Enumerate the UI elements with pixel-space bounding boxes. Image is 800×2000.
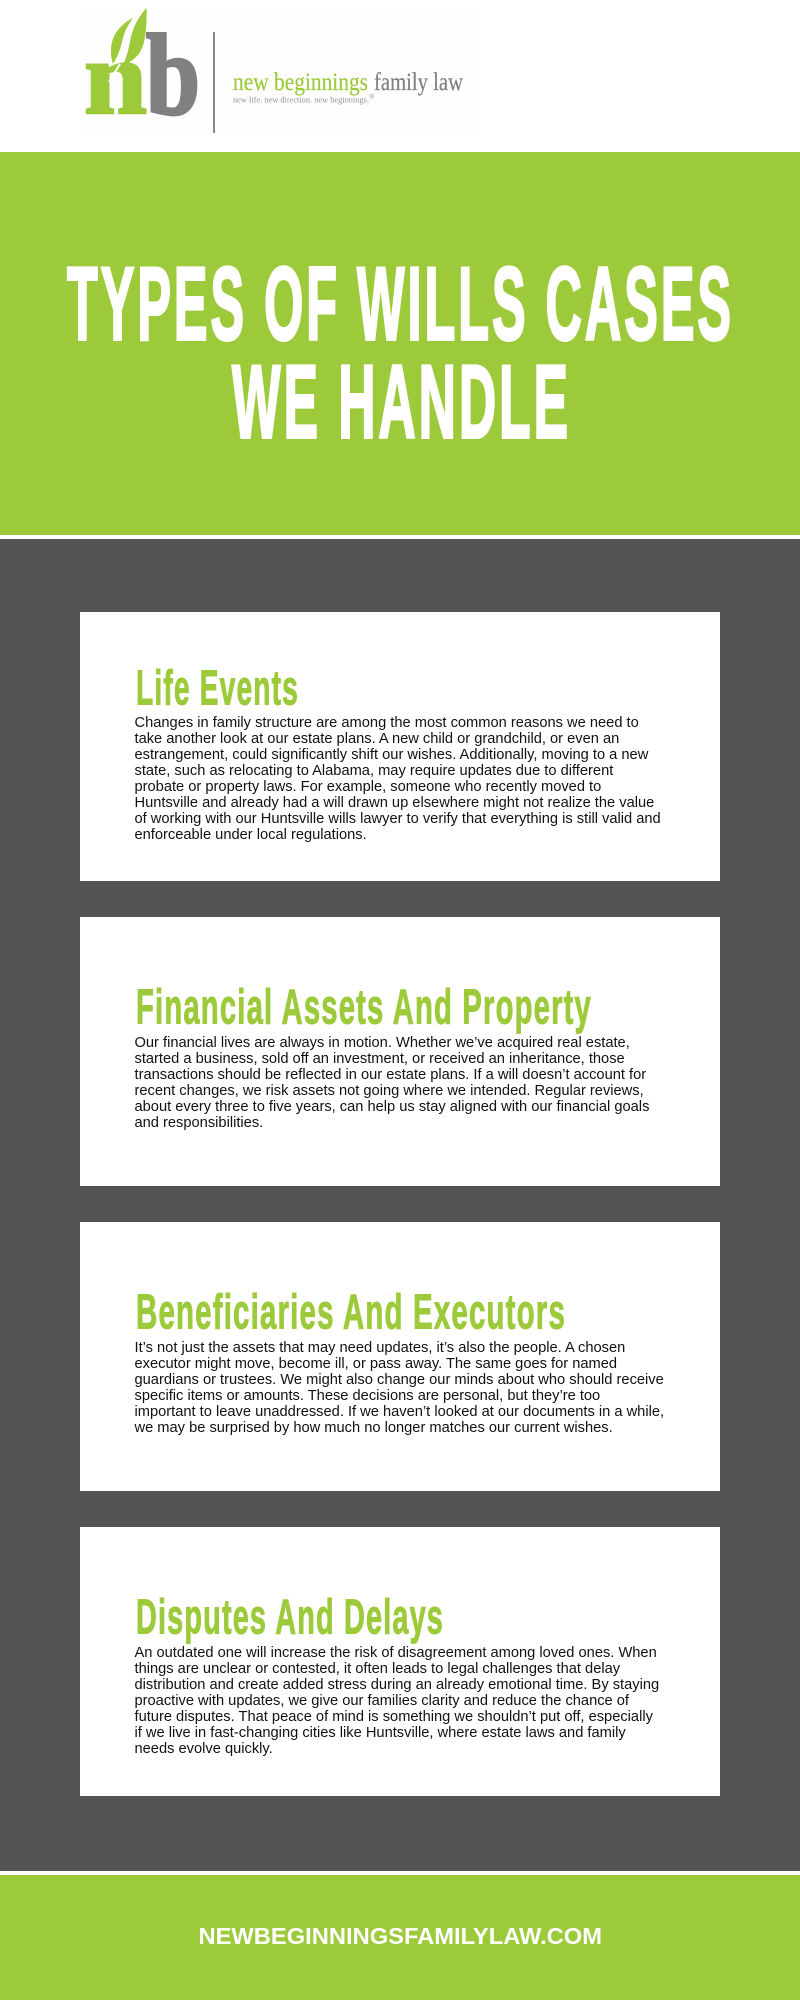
title bbox=[67, 246, 734, 460]
body text: life events: enforceable under local regulations. bbox=[134, 827, 367, 843]
body text: beneficiaries bbox=[134, 1340, 664, 1436]
body text: beneficiaries: It’s not just the assets that may need updates, it’s also the people. A chosen bbox=[134, 1340, 625, 1356]
body text: life events: take another look at our estate plans. A new child or grandchild, or even an bbox=[134, 731, 619, 747]
body text: disputes: An outdated one will increase the risk of disagreement among loved ones. When bbox=[134, 1645, 657, 1661]
body text: life events: Huntsville and already had a will drawn up elsewhere might not realize the value bbox=[134, 795, 654, 811]
dark content section bbox=[0, 539, 800, 1871]
body text: financial assets: transactions should be reflected in our estate plans. If a will doesn’t account for bbox=[134, 1067, 646, 1083]
heading: disputes and delays: Disputes And Delays bbox=[136, 1590, 444, 1644]
logo wordmark: ® bbox=[369, 93, 375, 101]
body text: life events: probate or property laws. For example, someone who recently moved to bbox=[134, 779, 601, 795]
panel: beneficiaries and executors bbox=[80, 1222, 720, 1491]
body text: financial assets: Our financial lives are always in motion. Whether we’ve acquired real estate, bbox=[134, 1035, 630, 1051]
body text: beneficiaries: specific items or amounts. These decisions are personal, but they’re too bbox=[134, 1388, 600, 1404]
body text: beneficiaries: important to leave unaddressed. If we haven’t looked at our documents in a while, bbox=[134, 1404, 664, 1420]
body text: disputes: future disputes. That peace of mind is something we shouldn’t put off, especially bbox=[134, 1709, 654, 1725]
body text: beneficiaries: we may be surprised by how much no longer matches our current wishes. bbox=[134, 1420, 613, 1436]
logo wordmark: family law bbox=[374, 69, 463, 96]
logo wordmark: new beginnings bbox=[233, 69, 368, 96]
body text: disputes: proactive with updates, we give our families clarity and reduce the chance of bbox=[134, 1693, 630, 1709]
body text: life events: estrangement, could significantly shift our wishes. Additionally, moving to a new bbox=[134, 747, 649, 763]
body text: beneficiaries: executor might move, become ill, or pass away. The same goes for named bbox=[134, 1356, 617, 1372]
body text: disputes: things are unclear or contested, it often leads to legal challenges that delay bbox=[134, 1661, 621, 1677]
panel: life events bbox=[80, 612, 720, 881]
body text: financial assets: started a business, sold off an investment, or received an inheritance, those bbox=[134, 1051, 625, 1067]
body text: disputes: distribution and create added stress during an already emotional time. By staying bbox=[134, 1677, 659, 1693]
panel: disputes and delays bbox=[80, 1527, 720, 1796]
body text: beneficiaries: guardians or trustees. We might also change our minds about who should receive bbox=[134, 1372, 664, 1388]
body text: financial assets: recent changes, we risk assets not going where we intended. Regular reviews, bbox=[134, 1083, 644, 1099]
body text: financial assets: about every three to five years, can help us stay aligned with our financial goals bbox=[134, 1099, 649, 1115]
logo mark: nb monogram with leaf: b bbox=[146, 12, 200, 140]
logo wordmark: new life. new direction. new beginnings. bbox=[233, 96, 369, 104]
body text: disputes: needs evolve quickly. bbox=[134, 1741, 273, 1757]
logo mark: nb monogram with leaf: n bbox=[84, 19, 147, 136]
body text: financial assets bbox=[134, 1035, 649, 1131]
body text: disputes: if we live in fast-changing cities like Huntsville, where estate laws and family bbox=[134, 1725, 626, 1741]
body text: disputes bbox=[134, 1645, 659, 1757]
body text: financial assets: and responsibilities. bbox=[134, 1115, 263, 1131]
body text: life events: of working with our Huntsville wills lawyer to verify that everything is still valid and bbox=[134, 811, 661, 827]
heading: life events: Life Events bbox=[136, 662, 299, 716]
body text: life events: state, such as relocating to Alabama, may require updates due to different bbox=[134, 763, 613, 779]
logo mark: nb monogram with leaf bbox=[84, 8, 200, 140]
footer url: NEWBEGINNINGSFAMILYLAW.COM bbox=[198, 1923, 602, 1949]
logo wordmark bbox=[233, 69, 463, 104]
footer band bbox=[0, 1875, 800, 2000]
body text: life events bbox=[134, 715, 661, 843]
logo bbox=[80, 8, 474, 140]
panel: financial assets and property bbox=[80, 917, 720, 1186]
body text: life events: Changes in family structure are among the most common reasons we need to bbox=[134, 715, 639, 731]
title band bbox=[0, 152, 800, 535]
